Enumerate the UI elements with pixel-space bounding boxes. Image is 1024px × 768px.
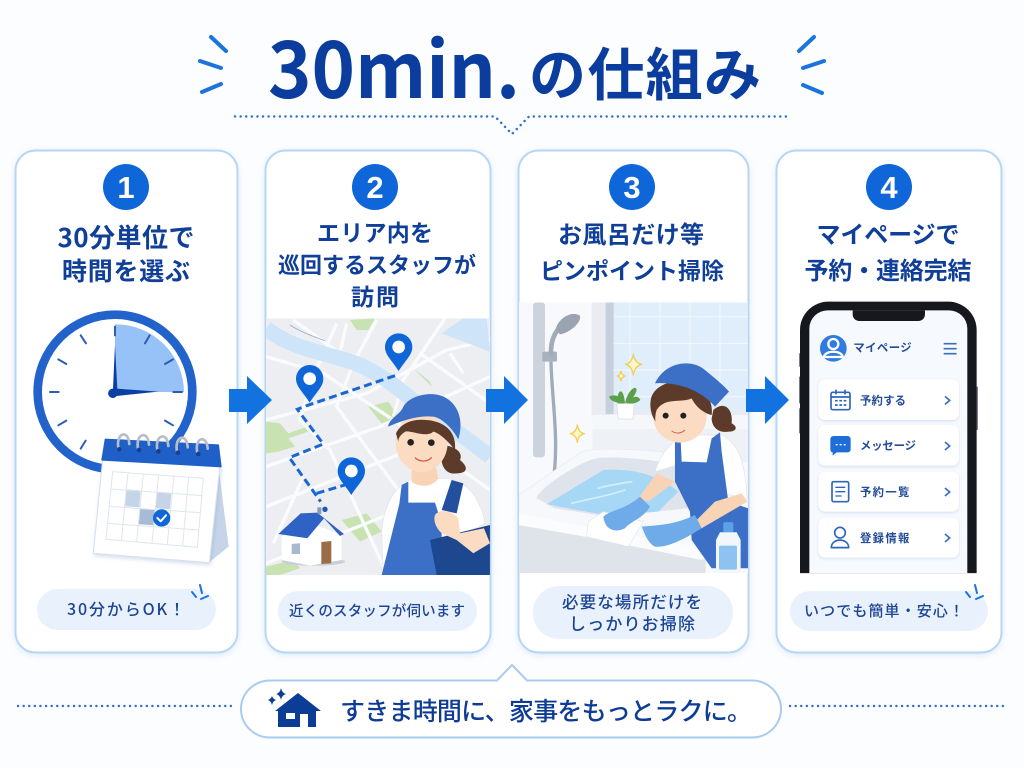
heading step 3: ピンポイント掃除: [540, 252, 724, 286]
menu: registration info: [818, 518, 959, 558]
heading step 3: [540, 215, 724, 286]
heading step 2: エリア内を: [317, 214, 433, 248]
menu: registration info: 登録情報: [860, 530, 910, 546]
step number 3: [609, 164, 655, 210]
menu: reservation list: 予約一覧: [860, 484, 909, 500]
plant and sparkles: [570, 354, 642, 443]
clock and calendar illustration: [38, 315, 229, 563]
step number 1: 1: [117, 170, 135, 205]
bottom dotted line left: [18, 705, 232, 707]
menu: message: メッセージ: [860, 438, 916, 454]
worker with cap and bag: [382, 394, 490, 575]
step number 4: 4: [880, 170, 898, 205]
heading step 4: [804, 215, 972, 286]
heading step 1: [58, 218, 194, 288]
bottom dotted line right: [790, 705, 1003, 707]
heading step 2: 訪問: [351, 278, 399, 312]
menu: message: [818, 425, 959, 466]
bathroom cleaning illustration: [519, 302, 748, 573]
map base: [266, 318, 490, 575]
heading step 3: お風呂だけ等: [558, 215, 704, 250]
panel: step 4: [776, 150, 1002, 652]
heading step 4: 予約・連絡完結: [804, 251, 972, 286]
heading step 4: マイページで: [816, 215, 960, 250]
heading step 1: 30分単位で: [58, 218, 194, 255]
title dotted divider: [235, 116, 789, 134]
banner text: すきま時間に、家事をもっとラクに。: [340, 692, 752, 728]
panel: step 1: [16, 150, 238, 652]
callout step 3: 必要な場所だけを: [562, 589, 702, 613]
callout step 3: しっかりお掃除: [569, 610, 695, 635]
bathtub: [519, 449, 706, 573]
my page header: [820, 335, 957, 362]
callout step 3: [533, 586, 733, 639]
menu: reserve: 予約する: [860, 392, 906, 408]
title sparks left: [200, 37, 226, 92]
calendar: [93, 434, 229, 563]
bathroom background: [519, 302, 748, 573]
house: [278, 507, 345, 566]
arrow 2 to 3: [486, 376, 528, 424]
map pins: [296, 333, 412, 495]
cleaning worker: [638, 363, 748, 568]
step number 2: 2: [366, 170, 384, 205]
clock: [38, 315, 192, 469]
route dashed line: [289, 376, 395, 502]
shower: [533, 302, 580, 472]
callout step 1: [37, 585, 216, 630]
cloth and gloves: [587, 497, 702, 547]
callout step 2: 近くのスタッフが伺います: [289, 600, 465, 621]
pin centres: [303, 341, 405, 477]
callout step 1: 30分からOK！: [67, 596, 185, 620]
heading step 2: [278, 214, 476, 312]
smartphone illustration: [799, 302, 978, 573]
title: 30min.: [268, 10, 520, 121]
step number 2: [352, 164, 398, 210]
icon: house with sparkle: [268, 688, 321, 727]
menu: reserve: [818, 379, 959, 420]
step number 4: [866, 164, 912, 210]
title sparks right: [799, 37, 824, 93]
title: の仕組み: [529, 30, 761, 112]
step number 3: 3: [623, 170, 641, 205]
panel: step 2: [266, 150, 490, 652]
callout step 4: [790, 585, 988, 631]
my page header: マイページ: [853, 340, 912, 356]
map illustration: [266, 318, 490, 575]
cleaner bottle: [716, 522, 741, 573]
bottom message banner: [241, 665, 781, 738]
menu: reservation list: [818, 472, 959, 512]
callout step 2: [278, 591, 477, 631]
callout step 4: いつでも簡単・安心！: [804, 600, 964, 621]
panel: step 3: [518, 150, 748, 652]
phone body: [799, 302, 978, 573]
heading step 1: 時間を選ぶ: [62, 252, 190, 288]
arrow 1 to 2: [229, 376, 272, 424]
title: [268, 10, 761, 121]
heading step 2: 巡回するスタッフが: [278, 248, 476, 280]
arrow 3 to 4: [746, 376, 789, 424]
step number 1: [103, 164, 149, 210]
